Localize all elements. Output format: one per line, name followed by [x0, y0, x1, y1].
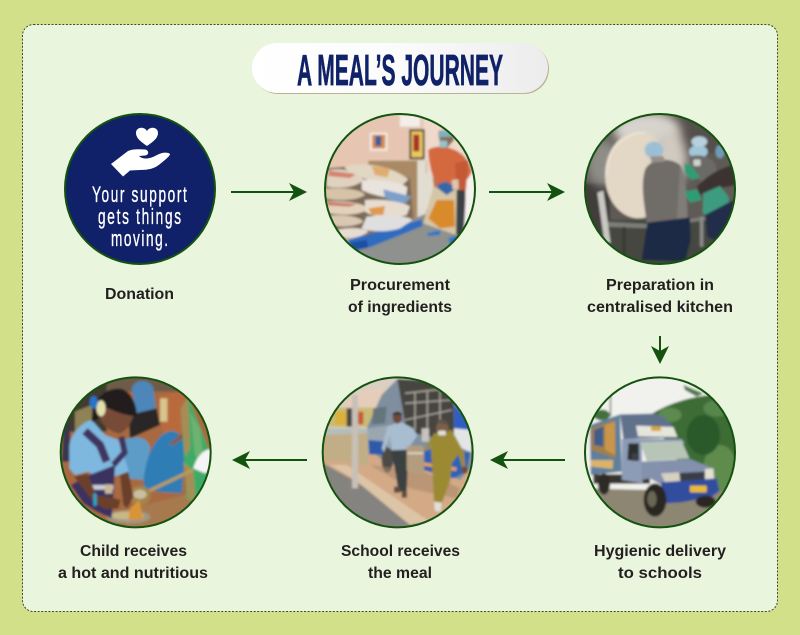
arrow: procurement to preparation [489, 183, 565, 201]
label: preparation: centralised kitchen [587, 299, 733, 316]
label: procurement [348, 277, 452, 316]
label: child: a hot and nutritious [58, 565, 208, 582]
step 1: donation circle: gets things [98, 204, 181, 229]
title pill: A MEAL’S JOURNEY [297, 46, 503, 95]
arrow: preparation to delivery [651, 336, 669, 364]
step 4: delivery truck photo [583, 375, 737, 532]
step 5: school photo [320, 375, 477, 532]
label: preparation: Preparation in [606, 277, 714, 294]
label: procurement: of ingredients [348, 299, 452, 316]
step 2: procurement photo [323, 113, 477, 267]
step 6: child photo [60, 375, 213, 532]
icon: hand holding heart [111, 128, 170, 176]
label: school: School receives [341, 543, 460, 560]
label: delivery: Hygienic delivery [594, 543, 726, 560]
arrow: delivery to school [490, 451, 565, 469]
step 1: donation circle: moving. [111, 226, 168, 251]
arrow: school to child [232, 451, 307, 469]
arrow: donation to procurement [231, 183, 307, 201]
label: school [341, 543, 460, 582]
step 1: donation circle [65, 114, 215, 264]
title pill [252, 43, 549, 95]
label: child [58, 543, 208, 582]
label: delivery [594, 543, 726, 582]
step 3: preparation photo [583, 112, 737, 267]
label: child: Child receives [80, 543, 187, 560]
label: school: the meal [368, 565, 432, 582]
label: delivery: to schools [618, 565, 702, 582]
label: donation: Donation [105, 286, 174, 303]
label: procurement: Procurement [350, 277, 450, 294]
label: preparation [587, 277, 733, 316]
step 1: donation circle: Your support [92, 182, 187, 207]
